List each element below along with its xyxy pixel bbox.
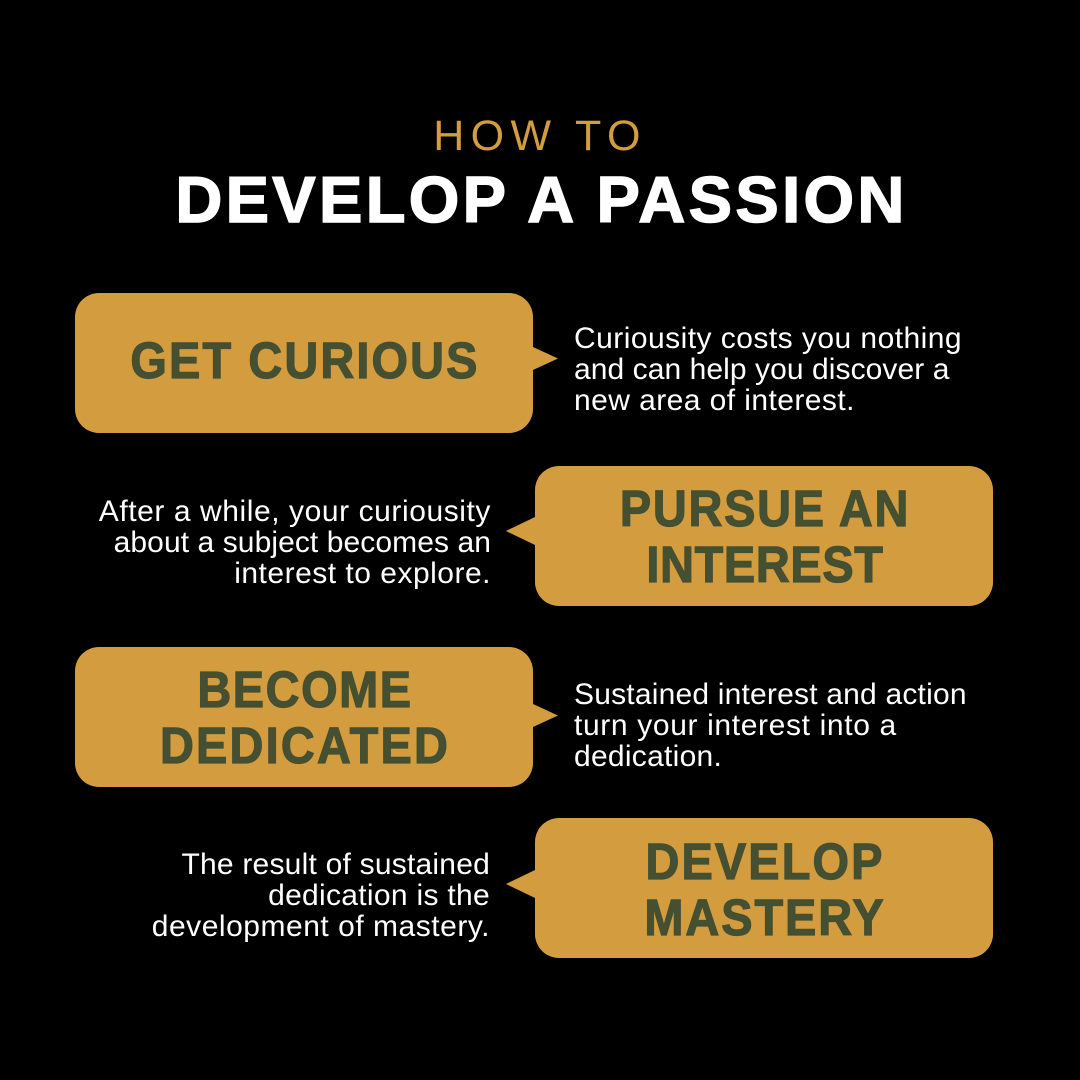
text: pursue description: about a subject becomes an — [114, 526, 491, 559]
panel: develop mastery — [535, 818, 993, 958]
text: develop mastery description: development of mastery. — [152, 910, 490, 943]
panel: get curious: GET CURIOUS — [130, 332, 480, 389]
text: develop mastery description: dedication is the — [268, 879, 490, 912]
panel: become dedicated — [75, 647, 533, 787]
panel: become dedicated: DEDICATED — [160, 717, 450, 774]
panel: pursue an interest — [535, 466, 993, 606]
arrow: develop mastery pointer — [506, 870, 535, 898]
panel: pursue an interest: PURSUE AN — [620, 480, 910, 537]
text: pursue description: After a while, your curiousity — [99, 495, 491, 528]
text: become dedicated description: Sustained interest and action — [574, 678, 967, 711]
text: develop mastery description: The result of sustained — [181, 848, 490, 881]
panel: develop mastery: MASTERY — [644, 889, 886, 946]
text: develop mastery description — [152, 848, 490, 943]
text: get curious description: and can help you discover a — [574, 353, 949, 386]
text: become dedicated description — [574, 678, 967, 773]
panel: develop mastery: DEVELOP — [645, 833, 885, 890]
text: get curious description: Curiousity costs you nothing — [574, 322, 962, 355]
text: become dedicated description: dedication. — [574, 740, 722, 773]
panel: get curious — [75, 293, 533, 433]
title: how to: HOW TO — [433, 112, 647, 160]
panel: become dedicated: BECOME — [197, 661, 413, 718]
text: get curious description — [574, 322, 962, 417]
text: pursue description — [98, 495, 491, 590]
text: get curious description: new area of interest. — [574, 384, 855, 417]
title: develop a passion: DEVELOP A PASSION — [175, 163, 908, 236]
arrow: pursue pointer — [506, 517, 535, 545]
text: pursue description: interest to explore. — [234, 557, 491, 590]
text: become dedicated description: turn your interest into a — [574, 709, 897, 742]
arrow: become dedicated pointer — [533, 704, 558, 727]
arrow: get curious pointer — [533, 347, 558, 370]
panel: pursue an interest: INTEREST — [646, 536, 884, 593]
